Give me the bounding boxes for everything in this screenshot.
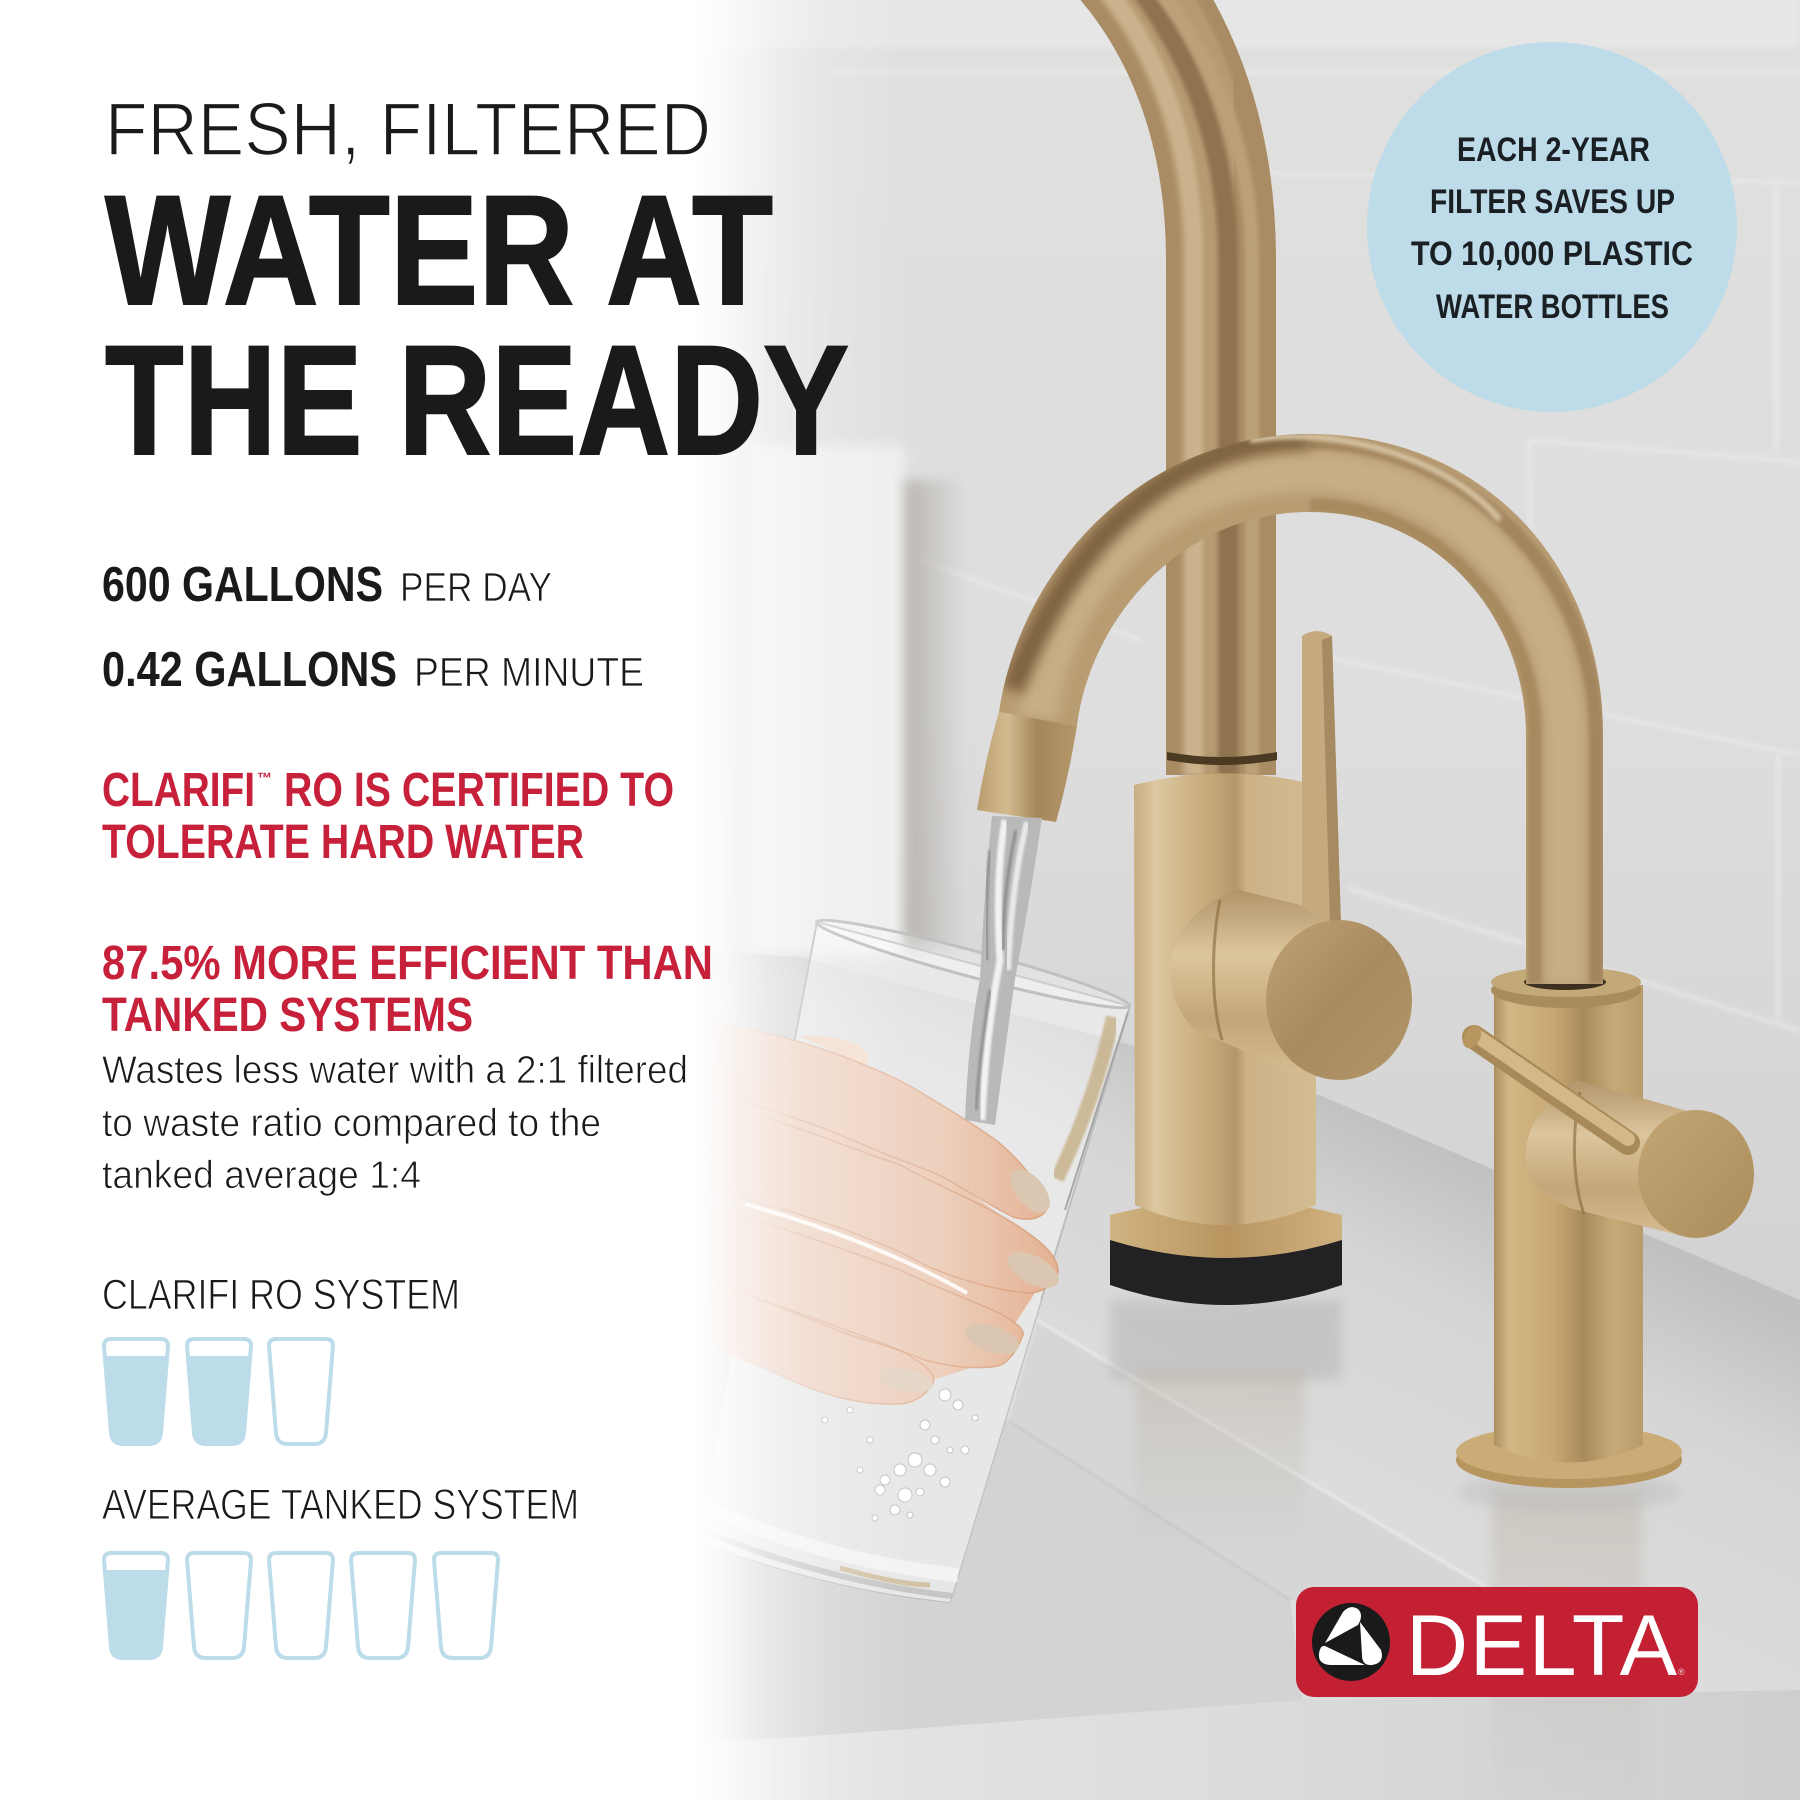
photo background: wall and counter — [680, 0, 1800, 1800]
body text: waste ratio: Wastes less water with a 2:1 filtered — [102, 1049, 688, 1092]
front faucet — [960, 400, 1754, 1488]
callout: efficiency: 87.5% MORE EFFICIENT THAN — [102, 937, 713, 990]
rim of glass — [813, 910, 1133, 1018]
reflections on counter — [1110, 1300, 1681, 1800]
callout circle: plastic bottles saved: EACH 2-YEAR — [1457, 131, 1650, 169]
rear faucet — [1080, 0, 1412, 1305]
rear faucet handle cylinder — [1170, 890, 1340, 1075]
empty glass — [351, 1553, 415, 1658]
glasses: tanked 1 of 5 filled — [104, 1553, 498, 1660]
finger 2 — [707, 1103, 1058, 1293]
callout: efficiency: TANKED SYSTEMS — [102, 989, 473, 1042]
callout circle: plastic bottles saved: FILTER SAVES UP — [1430, 183, 1675, 221]
blurred box beside wall — [750, 445, 966, 955]
label: average tanked system: AVERAGE TANKED SYSTEM — [102, 1481, 579, 1529]
thumb hint — [800, 1036, 868, 1064]
front lever — [1459, 1023, 1628, 1143]
water highlight between fingers — [745, 1204, 967, 1293]
rear faucet handle disc — [1266, 920, 1412, 1080]
empty glass — [269, 1553, 333, 1658]
glass base — [702, 1505, 958, 1575]
callout circle: plastic bottles saved — [1367, 42, 1737, 412]
front handle cylinder — [1526, 1080, 1690, 1236]
stat: 0.42 gallons per minute — [102, 643, 644, 697]
finger 1 — [707, 1022, 1048, 1219]
body text: waste ratio: tanked average 1:4 — [102, 1154, 421, 1197]
glasses: clarifi ro 2 of 3 filled — [104, 1339, 333, 1446]
headline line: the ready: THE READY — [105, 314, 849, 488]
filled glass — [104, 1339, 168, 1446]
nails — [875, 1162, 1064, 1397]
logo wordmark: DELTA — [1406, 1598, 1678, 1694]
callout: hard water certification — [102, 764, 674, 869]
hand holding glass — [693, 1022, 1064, 1404]
callout circle: plastic bottles saved: TO 10,000 PLASTIC — [1411, 235, 1693, 273]
headline — [105, 87, 849, 488]
stat: 0.42 gallons per minute: 0.42 GALLONS — [102, 643, 397, 697]
counter bottom slab — [690, 1690, 1800, 1800]
wall — [680, 0, 1800, 1400]
white fade over photo — [0, 0, 910, 1800]
rear faucet black ring — [1110, 1240, 1342, 1305]
registered mark: ® — [1678, 1667, 1685, 1677]
front faucet body — [1494, 985, 1643, 1462]
logo emblem — [1312, 1603, 1390, 1681]
water in glass — [700, 1190, 1041, 1602]
headline line: water at: WATER AT — [105, 164, 773, 338]
water stream — [965, 816, 1042, 1125]
stat: 600 gallons per day: 600 GALLONS — [102, 558, 383, 612]
empty glass — [187, 1553, 251, 1658]
empty glass — [434, 1553, 498, 1658]
glass with water — [700, 910, 1133, 1602]
body text: waste ratio — [102, 1049, 688, 1197]
callout: hard water certification: ™ — [257, 770, 272, 787]
rear faucet gold base — [1110, 1200, 1342, 1258]
callout: hard water certification: TOLERATE HARD WATER — [102, 816, 584, 869]
empty glass — [269, 1339, 333, 1444]
spout — [999, 434, 1603, 984]
counter front band — [1009, 1323, 1500, 1640]
front handle disc — [1638, 1110, 1754, 1238]
callout: hard water certification: CLARIFI — [102, 764, 255, 817]
rear faucet tube — [1080, 0, 1252, 775]
rear faucet collar line — [1167, 752, 1277, 765]
stat: 600 gallons per day: PER DAY — [400, 564, 552, 610]
spout tip — [977, 712, 1077, 822]
counter lower face — [690, 1300, 1302, 1738]
counter front edge highlight — [1020, 1310, 1486, 1587]
finger 4 — [693, 1277, 934, 1404]
bubbles — [822, 1389, 978, 1521]
label: clarifi ro system: CLARIFI RO SYSTEM — [102, 1271, 460, 1319]
rear faucet lever — [1302, 631, 1341, 925]
callout: hard water certification: RO IS CERTIFIED TO — [284, 764, 674, 817]
top wall band — [680, 0, 1800, 48]
filled glass — [187, 1339, 251, 1446]
counter top — [690, 950, 1800, 1800]
glass body — [700, 922, 1130, 1602]
front faucet base — [1456, 1425, 1682, 1488]
front faucet collar — [1491, 967, 1641, 1008]
finger 3 — [693, 1201, 1023, 1368]
delta logo — [1296, 1587, 1698, 1697]
callout circle: plastic bottles saved: WATER BOTTLES — [1436, 288, 1669, 326]
rear faucet body — [1134, 774, 1316, 1225]
headline line: fresh, filtered: FRESH, FILTERED — [105, 87, 711, 171]
filled glass — [104, 1553, 168, 1660]
callout: efficiency — [102, 937, 713, 1042]
gold reflection in glass — [1057, 1017, 1113, 1179]
palm underlay — [700, 1060, 1040, 1390]
stat: 0.42 gallons per minute: PER MINUTE — [414, 649, 644, 695]
body text: waste ratio: to waste ratio compared to the — [102, 1102, 601, 1145]
